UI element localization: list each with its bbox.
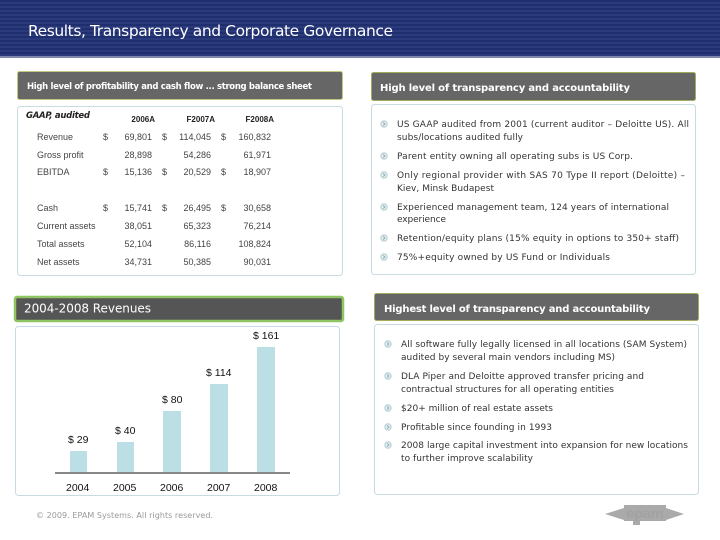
dollar signs: $ xyxy=(221,167,226,177)
list text: Parent entity owning all operating subs is US Corp. xyxy=(397,152,633,162)
panel heading: profitability: High level of profitability and cash flow ... strong balance sheet xyxy=(27,82,312,92)
year labels: 2004 xyxy=(66,482,90,494)
table values: 34,731 xyxy=(124,257,152,267)
value labels: $ 161 xyxy=(253,330,279,342)
copyright: © 2009. EPAM Systems. All rights reserved. xyxy=(36,511,213,520)
bars xyxy=(70,347,275,472)
table values: 90,031 xyxy=(243,257,271,267)
table values: 86,116 xyxy=(184,239,211,249)
panel heading: profitability xyxy=(18,72,342,100)
table note: GAAP, audited xyxy=(26,111,91,121)
list text: All software fully legally licensed in all locations (SAM System) xyxy=(401,340,687,350)
dollar signs: $ xyxy=(103,132,108,142)
table values: 30,658 xyxy=(243,203,271,213)
title: Results, Transparency and Corporate Governance xyxy=(28,22,393,40)
list text: US GAAP audited from 2001 (current auditor – Deloitte US). All xyxy=(397,120,689,130)
year labels: 2008 xyxy=(254,482,278,494)
table values xyxy=(124,132,271,267)
row labels: Current assets xyxy=(37,221,96,231)
panel: highest transparency list xyxy=(374,324,698,494)
header banner xyxy=(0,0,720,58)
table values: 65,323 xyxy=(183,221,211,231)
panel heading: revenues xyxy=(15,297,343,321)
table values: 61,971 xyxy=(243,150,271,160)
table values: 18,907 xyxy=(243,167,271,177)
axis xyxy=(55,472,290,474)
table values: 26,495 xyxy=(183,203,211,213)
list text: $20+ million of real estate assets xyxy=(401,404,553,414)
list text xyxy=(401,340,688,464)
year labels: 2005 xyxy=(113,482,137,494)
value labels: $ 114 xyxy=(206,367,232,379)
table values: 114,045 xyxy=(179,132,211,142)
list text: experience xyxy=(397,215,446,225)
year labels: 2007 xyxy=(207,482,231,494)
list text: DLA Piper and Deloitte approved transfer pricing and xyxy=(401,372,644,382)
dollar signs: $ xyxy=(221,132,226,142)
dollar signs xyxy=(103,132,226,213)
list text: 75%+equity owned by US Fund or Individuals xyxy=(397,253,610,263)
table values: 108,824 xyxy=(238,239,271,249)
panel heading: transparency xyxy=(372,72,696,100)
row labels: Revenue xyxy=(37,132,73,142)
dollar signs: $ xyxy=(162,132,167,142)
value labels: $ 40 xyxy=(115,425,136,437)
list text xyxy=(397,120,689,263)
row labels: Total assets xyxy=(37,239,85,249)
dollar signs: $ xyxy=(103,203,108,213)
column headings: 2006A xyxy=(131,115,155,124)
bullets xyxy=(385,341,391,448)
table values: 52,104 xyxy=(124,239,152,249)
value labels: $ 29 xyxy=(68,434,89,446)
column headings xyxy=(131,115,274,124)
table values: 50,385 xyxy=(183,257,211,267)
row labels xyxy=(37,132,96,267)
panel: transparency list xyxy=(372,104,696,274)
panel: revenue bar chart xyxy=(16,326,340,496)
list text: Experienced management team, 124 years of international xyxy=(397,203,669,213)
table values: 28,898 xyxy=(124,150,152,160)
logo: epam xyxy=(626,507,664,522)
list text: Retention/equity plans (15% equity in options to 350+ staff) xyxy=(397,234,679,244)
row labels: Gross profit xyxy=(37,150,84,160)
dollar signs: $ xyxy=(103,167,108,177)
dollar signs: $ xyxy=(221,203,226,213)
table values: 38,051 xyxy=(124,221,152,231)
list text: contractual structures for all operating entities xyxy=(401,385,614,395)
dollar signs: $ xyxy=(162,167,167,177)
table values: 15,136 xyxy=(124,167,152,177)
list text: Only regional provider with SAS 70 Type II report (Deloitte) – xyxy=(397,171,686,181)
logo xyxy=(605,505,684,525)
list text: 2008 large capital investment into expansion for new locations xyxy=(401,441,688,451)
panel heading: highest transparency xyxy=(374,294,698,320)
table values: 69,801 xyxy=(124,132,152,142)
value labels xyxy=(68,330,279,446)
year labels: 2006 xyxy=(160,482,184,494)
panel heading: transparency: High level of transparency and accountability xyxy=(380,83,630,94)
panel: financial table xyxy=(18,106,342,276)
dollar signs: $ xyxy=(162,203,167,213)
list text: subs/locations audited fully xyxy=(397,133,524,143)
column headings: F2007A xyxy=(187,115,215,124)
table values: 76,214 xyxy=(243,221,271,231)
list text: audited by several main vendors including MS) xyxy=(401,353,615,363)
row labels: EBITDA xyxy=(37,167,70,177)
column headings: F2008A xyxy=(246,115,274,124)
table values: 54,286 xyxy=(183,150,211,160)
table values: 160,832 xyxy=(238,132,271,142)
table values: 15,741 xyxy=(124,203,152,213)
year labels xyxy=(66,482,278,494)
value labels: $ 80 xyxy=(162,394,183,406)
row labels: Cash xyxy=(37,203,58,213)
list text: to further improve scalability xyxy=(401,454,534,464)
panel heading: highest transparency: Highest level of transparency and accountability xyxy=(384,304,650,315)
bullets xyxy=(381,121,387,260)
panel heading: revenues: 2004-2008 Revenues xyxy=(24,302,151,316)
table values: 20,529 xyxy=(183,167,211,177)
list text: Profitable since founding in 1993 xyxy=(401,423,552,433)
row labels: Net assets xyxy=(37,257,80,267)
list text: Kiev, Minsk Budapest xyxy=(397,184,494,194)
